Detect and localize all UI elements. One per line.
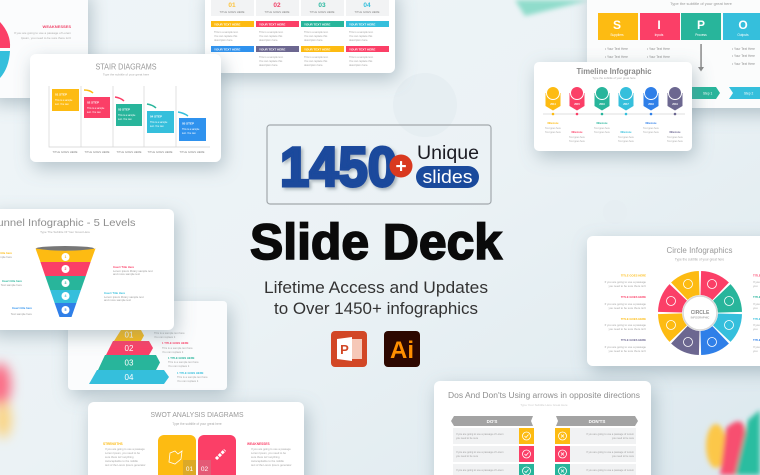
pyramid bands: 03 xyxy=(125,358,134,368)
circle right captions: If you xyxy=(753,323,760,327)
table text row one: You can replace this xyxy=(349,34,373,38)
row text: you need to be sure xyxy=(612,455,635,458)
table text row one: description here. xyxy=(214,38,233,42)
table text row two: This is a sample text. xyxy=(349,55,374,59)
circle left captions xyxy=(605,274,646,353)
stair steps: This is a sample xyxy=(150,121,168,124)
SIPO down arrow xyxy=(698,44,704,72)
SIPO bullets: • Your Text Here xyxy=(732,62,755,66)
circle left captions: TITLE GOES HERE xyxy=(621,317,646,321)
table text row two: You can replace this xyxy=(349,59,373,63)
timeline captions: Text goes here xyxy=(618,136,635,139)
table headers row one: YOUR TEXT HERE xyxy=(349,22,375,26)
timeline markers xyxy=(546,86,682,115)
do and don't header bars: DON'TS xyxy=(589,419,605,424)
SWOT pink card xyxy=(198,435,236,475)
table text row one: This is a sample text. xyxy=(214,30,239,34)
slides pill: slides xyxy=(422,167,472,187)
timeline markers: 2018 xyxy=(648,103,654,106)
timeline captions: Text goes here xyxy=(569,140,586,143)
funnel captions right: and more sample text xyxy=(113,272,140,276)
stair steps: 04 STEP xyxy=(150,114,162,118)
SWOT heading: Type the subtitle of your great here xyxy=(172,422,222,426)
wheel glyph rings xyxy=(666,280,734,346)
decorative blobs bottom right xyxy=(706,410,760,475)
SWOT weaknesses text: Lorem Ipsum, you need to be xyxy=(251,451,286,455)
SIPO bullets: • Your Text Here xyxy=(605,55,628,59)
funnel chart: 2 xyxy=(65,267,67,271)
stair labels: TITLE GOES HERE xyxy=(179,150,205,154)
panel: SIPO slide xyxy=(587,0,760,108)
SIPO bullets: • Your Text Here xyxy=(605,47,628,51)
table headers row one: YOUR TEXT HERE xyxy=(304,22,330,26)
SWOT heading xyxy=(150,410,244,426)
SWOT strengths text: STRENGTHS xyxy=(103,442,123,446)
do and don't header bars xyxy=(451,416,638,426)
top number cards: 01 xyxy=(228,2,236,9)
table text row two: description here. xyxy=(349,63,368,67)
stair steps: text. You can xyxy=(150,125,164,128)
subtitle: Lifetime Access and Updates xyxy=(264,278,488,297)
top number cards: TITLE GOES HERE xyxy=(219,10,245,14)
SIPO blocks: Suppliers xyxy=(610,33,624,37)
don't icons xyxy=(555,428,570,475)
SIPO blocks: O xyxy=(738,18,748,32)
funnel captions right: Lorem ipsum library sample text xyxy=(104,295,144,299)
SWOT strengths text: Lorem Ipsum, you need to be xyxy=(105,451,140,455)
funnel captions left: Insert title here xyxy=(12,306,32,310)
timeline captions: Milestone xyxy=(645,122,657,125)
funnel captions right: and more sample text xyxy=(104,298,131,302)
wheel centre xyxy=(683,296,717,330)
timeline line xyxy=(543,113,685,115)
day arrows xyxy=(692,87,760,99)
stair heading: Type the subtitle of your great here xyxy=(103,72,150,76)
top number cards: 02 xyxy=(273,2,281,9)
timeline captions: Text goes here xyxy=(569,136,586,139)
icon: Illustrator: Ai xyxy=(390,337,414,364)
SIPO bullets: • Your Text Here xyxy=(647,47,670,51)
circle right captions xyxy=(753,274,760,353)
funnel captions right xyxy=(104,265,153,302)
funnel captions right: Insert Title Here xyxy=(113,265,135,269)
badge: 1450+ unique slides xyxy=(267,125,491,204)
pyramid captions: You can replace it xyxy=(162,350,184,354)
top number cards: TITLE GOES HERE xyxy=(264,10,290,14)
table text row one: This is a sample text. xyxy=(304,30,329,34)
SWOT weaknesses text: text of the Lorem Ipsum generator xyxy=(251,463,292,467)
SIPO bullets xyxy=(605,47,755,66)
circle left captions: you need to be sure there isn't xyxy=(608,284,646,288)
SWOT strengths text: Autocapitalize to the middle xyxy=(105,459,138,463)
SWOT weaknesses text: sure there isn't anything xyxy=(251,455,280,459)
pyramid captions: 1 TITLE GOES HERE xyxy=(162,341,189,345)
day arrows: Step 2 xyxy=(744,92,753,96)
pyramid captions: 1 TITLE GOES HERE xyxy=(168,356,195,360)
funnel captions left: Text sample here xyxy=(1,283,22,287)
table headers row one: YOUR TEXT HERE xyxy=(214,22,240,26)
funnel captions left: Text sample here xyxy=(11,312,32,316)
pyramid captions: This is a sample text here xyxy=(162,346,193,350)
row text: you need to be sure xyxy=(456,455,479,458)
table headers row two: YOUR TEXT HERE xyxy=(349,47,375,51)
row text: If you are going to use a passage of Lorem xyxy=(456,469,504,472)
pyramid bands: 02 xyxy=(125,344,134,353)
table text row two: You can replace this xyxy=(259,59,283,63)
pyramid captions: You can replace it xyxy=(177,379,199,383)
icon: PowerPoint: P xyxy=(340,342,349,357)
row text: If you are going to use a passage of Lorem xyxy=(586,469,634,472)
circle left captions: you need to be sure there isn't xyxy=(608,349,646,353)
funnel captions left xyxy=(0,251,32,316)
SIPO blocks: Inputs xyxy=(655,33,664,37)
panel: table slide xyxy=(205,0,395,73)
stair heading xyxy=(96,62,156,76)
panel: timeline infographic xyxy=(534,62,692,151)
circle left captions: If you are going to use a passage xyxy=(605,345,646,349)
timeline captions: Milestone xyxy=(571,131,583,134)
circle left captions: you need to be sure there isn't xyxy=(608,306,646,310)
dos heading: Type Your Subtitle Here Great Here xyxy=(520,403,568,407)
stair steps: text. You can xyxy=(182,132,196,135)
stair labels: TITLE GOES HERE xyxy=(84,150,110,154)
do and don't header bars: DO'S xyxy=(487,419,497,424)
icon: PowerPoint xyxy=(331,331,367,367)
table text row one: description here. xyxy=(349,38,368,42)
funnel chart: 1 xyxy=(65,255,67,259)
timeline captions: Milestone xyxy=(620,131,632,134)
SWOT weaknesses text xyxy=(247,442,292,467)
table text row one: This is a sample text. xyxy=(349,30,374,34)
pyramid captions: 1 TITLE GOES HERE xyxy=(177,371,204,375)
top number cards: 04 xyxy=(363,2,371,9)
table text row one xyxy=(214,30,374,42)
row text xyxy=(456,433,635,472)
timeline captions: Text goes here xyxy=(643,127,660,130)
day arrows: Step 1 xyxy=(703,92,712,96)
stair labels xyxy=(52,150,205,154)
pyramid captions: You can replace it xyxy=(154,335,176,339)
stair steps: 03 STEP xyxy=(118,108,130,112)
stair heading: STAIR DIAGRAMS xyxy=(96,62,156,72)
timeline captions: Milestone xyxy=(547,122,559,125)
table headers row two: YOUR TEXT HERE xyxy=(259,47,285,51)
number 1450: 1450 xyxy=(280,135,397,198)
timeline markers: 2017 xyxy=(623,103,629,106)
funnel chart: 4 xyxy=(65,294,67,298)
funnel chart: 5 xyxy=(65,308,67,312)
circle right captions: If you xyxy=(753,280,760,284)
word unique: Unique xyxy=(417,143,479,164)
stair steps: text. You can xyxy=(118,118,132,121)
dos heading: Dos And Don'ts Using arrows in opposite directions xyxy=(448,391,640,400)
row text: If you are going to use a passage of Lorem xyxy=(456,451,504,454)
do and don't rows xyxy=(453,428,636,475)
stair labels: TITLE GOES HERE xyxy=(116,150,142,154)
pyramid bands xyxy=(89,330,169,384)
stair steps: text. You can xyxy=(87,111,101,114)
timeline captions: Milestone xyxy=(596,122,608,125)
stair steps: This is a sample xyxy=(87,107,105,110)
SIPO blocks: I xyxy=(657,18,661,32)
pyramid captions: This is a sample text here xyxy=(177,375,208,379)
table headers row two: YOUR TEXT HERE xyxy=(304,47,330,51)
table text row one: description here. xyxy=(259,38,278,42)
pyramid captions: You can replace it xyxy=(168,364,190,368)
timeline captions: Milestone xyxy=(669,131,681,134)
SIPO blocks: S xyxy=(613,18,621,32)
SWOT strengths text xyxy=(103,442,146,467)
timeline captions: Text goes here xyxy=(594,131,611,134)
panel: SWOT analysis xyxy=(88,402,304,475)
table text row one: You can replace this xyxy=(259,34,283,38)
table text row one: This is a sample text. xyxy=(259,30,284,34)
circle right captions: you xyxy=(753,284,758,288)
SWOT yellow card: 01 xyxy=(186,466,193,473)
plus badge: + xyxy=(395,156,407,178)
table text row two xyxy=(259,55,374,67)
stair arrows xyxy=(84,90,188,116)
top number cards: 03 xyxy=(318,2,326,9)
SIPO bullets: • Your Text Here xyxy=(732,47,755,51)
panel: circle infographics xyxy=(587,236,760,366)
funnel chart xyxy=(36,246,96,317)
panel: pyramid slide xyxy=(68,301,227,390)
pyramid captions xyxy=(154,331,208,383)
SIPO blocks: P xyxy=(697,18,705,32)
table headers row two: YOUR TEXT HERE xyxy=(214,47,240,51)
wheel centre: INFOGRAPHIC xyxy=(691,316,709,320)
stair steps: 02 STEP xyxy=(87,100,99,104)
table text row two: This is a sample text. xyxy=(259,55,284,59)
circle left captions: If you are going to use a passage xyxy=(605,302,646,306)
circle right captions: you xyxy=(753,306,758,310)
timeline captions: Text goes here xyxy=(618,140,635,143)
plus badge xyxy=(390,154,412,178)
funnel chart: 3 xyxy=(65,281,67,285)
wheel centre: CIRCLE xyxy=(691,310,710,316)
SIPO blocks: Process xyxy=(695,33,707,37)
slides pill xyxy=(416,166,479,188)
decorative blob bottom left xyxy=(0,363,11,438)
timeline markers: 2015 xyxy=(574,103,580,106)
stair steps xyxy=(52,89,206,141)
SIPO subtitle: Type the subtitle of your great here xyxy=(670,1,733,6)
dos heading xyxy=(448,391,640,407)
SIPO bullets: • Your Text Here xyxy=(647,55,670,59)
weaknesses text: If you are going to use a passage of Lorem xyxy=(14,31,71,35)
row text: you need to be sure xyxy=(612,437,635,440)
table headers row two xyxy=(211,46,389,52)
table text row one: You can replace this xyxy=(304,34,328,38)
SWOT weaknesses text: WEAKNESSES xyxy=(247,442,270,446)
SIPO blocks: Outputs xyxy=(737,33,749,37)
SWOT weaknesses text: Autocapitalize to the middle xyxy=(251,459,284,463)
SWOT weaknesses text: If you are going to use a passage xyxy=(251,447,291,451)
SWOT strengths text: If you are going to use a passage xyxy=(105,447,145,451)
timeline markers: 2019 xyxy=(672,103,678,106)
circle left captions: TITLE GOES HERE xyxy=(621,274,646,278)
SWOT pink card: 02 xyxy=(201,466,208,473)
decorative pale circles xyxy=(393,73,627,224)
timeline captions: Text goes here xyxy=(667,136,684,139)
row text: If you are going to use a passage of Lorem xyxy=(586,433,634,436)
circle left captions: TITLE GOES HERE xyxy=(621,295,646,299)
row text: you need to be sure xyxy=(456,437,479,440)
pyramid captions: This is a sample text here xyxy=(168,360,199,364)
timeline captions: Text goes here xyxy=(667,140,684,143)
timeline captions: Text goes here xyxy=(643,131,660,134)
subtitle xyxy=(264,278,488,318)
circle right captions: If you xyxy=(753,345,760,349)
SWOT strengths text: text of the Lorem Ipsum generator xyxy=(105,463,146,467)
SIPO bullets: • Your Text Here xyxy=(732,54,755,58)
pyramid captions: This is a sample text here xyxy=(154,331,185,335)
weaknesses text: Ipsum, you need to be sure there isn't xyxy=(21,36,71,40)
table text row one: description here. xyxy=(304,38,323,42)
timeline captions: Text goes here xyxy=(545,131,562,134)
table text row two: This is a sample text. xyxy=(304,55,329,59)
timeline markers: 2016 xyxy=(599,103,605,106)
top number cards: TITLE GOES HERE xyxy=(354,10,380,14)
weaknesses text xyxy=(14,24,71,40)
circle wheel xyxy=(650,263,750,363)
subtitle: to Over 1450+ infographics xyxy=(274,299,478,318)
panel: weaknesses slide xyxy=(0,0,88,98)
stair steps: This is a sample xyxy=(55,99,73,102)
stair steps: text. You can xyxy=(55,103,69,106)
pyramid bands: 04 xyxy=(125,373,134,382)
SWOT heading: SWOT ANALYSIS DIAGRAMS xyxy=(150,410,244,419)
stair steps: This is a sample xyxy=(182,128,200,131)
timeline captions: Text goes here xyxy=(545,127,562,130)
funnel captions right: Insert Title Here xyxy=(104,291,126,295)
stair steps: This is a sample xyxy=(118,114,136,117)
table text row one: You can replace this xyxy=(214,34,238,38)
timeline markers: 2014 xyxy=(550,103,556,106)
circle left captions: TITLE GOES HERE xyxy=(621,338,646,342)
weaknesses text: WEAKNESSES xyxy=(43,24,71,29)
funnel heading xyxy=(0,217,136,234)
top number cards: TITLE GOES HERE xyxy=(309,10,335,14)
timeline heading: Type the subtitle of your great here xyxy=(592,76,636,80)
timeline captions xyxy=(545,122,684,143)
funnel heading: Type The Subtitle Of Your Great Here xyxy=(40,230,90,234)
timeline captions: Text goes here xyxy=(594,127,611,130)
table text row two: description here. xyxy=(304,63,323,67)
circle right captions: you xyxy=(753,327,758,331)
circle right captions: you xyxy=(753,349,758,353)
row text: If you are going to use a passage of Lorem xyxy=(456,433,504,436)
stair axes xyxy=(49,86,210,147)
row text: If you are going to use a passage of Lorem xyxy=(586,451,634,454)
top number cards xyxy=(211,0,389,16)
timeline heading xyxy=(576,67,652,80)
do icons xyxy=(519,428,534,475)
SWOT yellow card xyxy=(158,435,196,475)
funnel captions right: Lorem ipsum library sample text xyxy=(113,269,153,273)
panel: funnel infographic xyxy=(0,209,174,330)
decorative teal swoosh xyxy=(515,0,590,16)
stair labels: TITLE GOES HERE xyxy=(147,150,173,154)
circle heading: Circle Infographics xyxy=(666,246,732,255)
table headers row one: YOUR TEXT HERE xyxy=(259,22,285,26)
circle left captions: you need to be sure there isn't xyxy=(608,327,646,331)
SWOT strengths text: sure there isn't anything xyxy=(105,455,134,459)
table text row two: You can replace this xyxy=(304,59,328,63)
pyramid bands: 01 xyxy=(125,330,134,340)
panel: dos and don'ts xyxy=(434,381,651,475)
icon: Illustrator xyxy=(384,331,420,367)
panel: stair diagrams xyxy=(30,54,221,162)
stair steps: 01 STEP xyxy=(55,92,67,96)
funnel captions left: Insert title here xyxy=(2,279,22,283)
SIPO blocks xyxy=(598,13,760,40)
title: Slide Deck xyxy=(250,214,502,270)
circle right captions: If you xyxy=(753,302,760,306)
stair steps: 05 STEP xyxy=(182,122,194,126)
circle heading xyxy=(666,246,732,262)
circle heading: Type the subtitle of your great here xyxy=(675,258,724,262)
table headers row one xyxy=(211,21,389,27)
stair labels: TITLE GOES HERE xyxy=(52,150,78,154)
table text row two: description here. xyxy=(259,63,278,67)
pie chart fragment xyxy=(0,22,10,78)
timeline heading: Timeline Infographic xyxy=(576,67,652,76)
circle left captions: If you are going to use a passage xyxy=(605,323,646,327)
circle left captions: If you are going to use a passage xyxy=(605,280,646,284)
